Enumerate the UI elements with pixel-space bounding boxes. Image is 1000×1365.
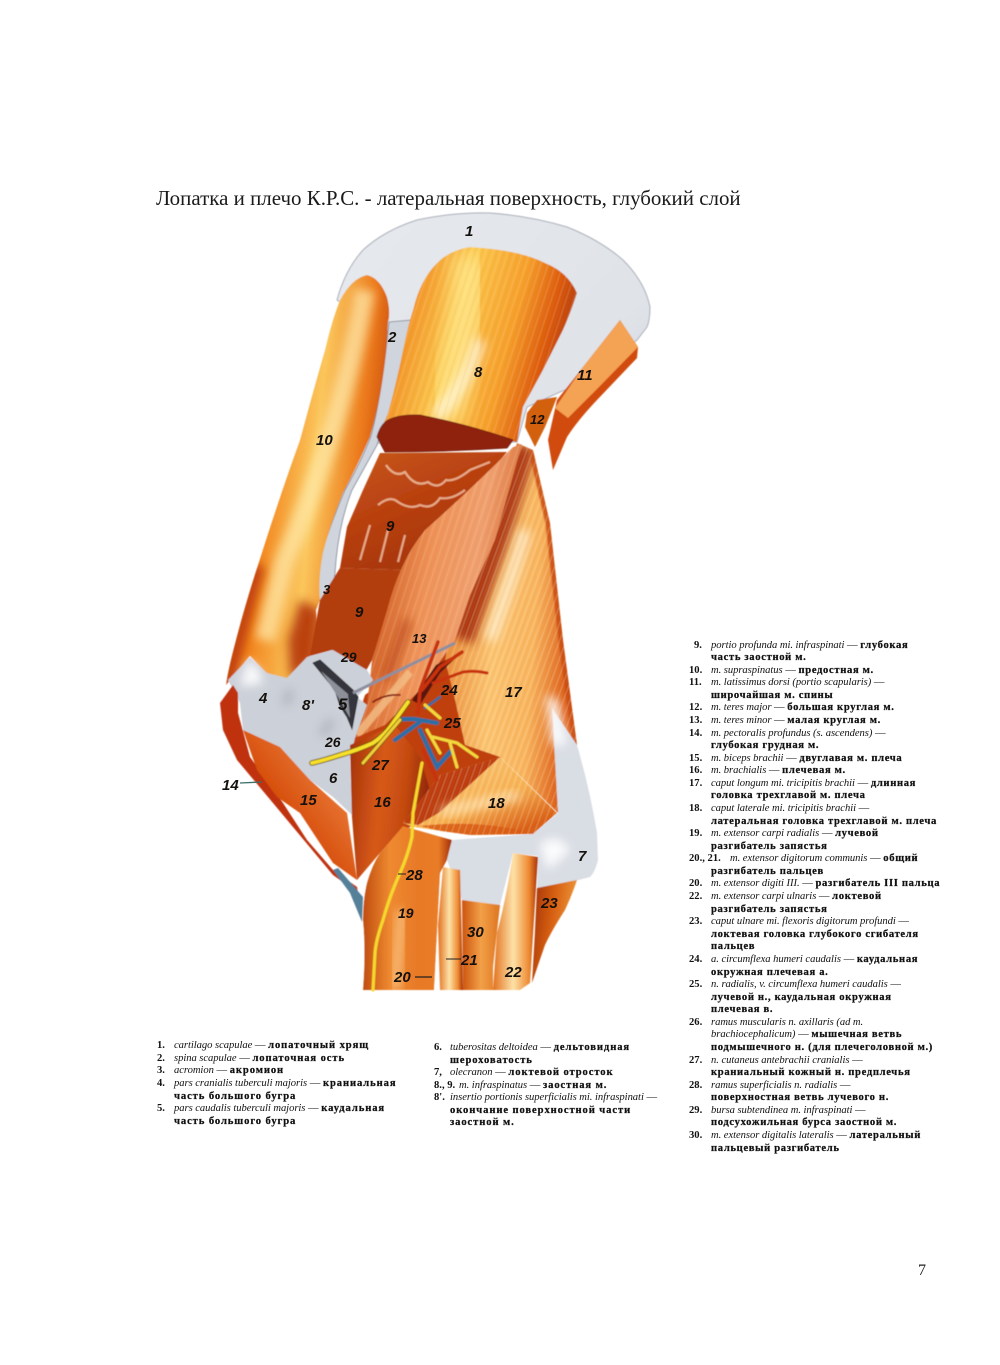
label 9 lower: 9 — [355, 604, 364, 621]
label 30: 30 — [467, 924, 484, 941]
label 11: 11 — [577, 367, 593, 384]
text: 5. — [157, 1103, 165, 1114]
muscle 12: teres major — [525, 397, 557, 447]
label 7: 7 — [578, 848, 587, 865]
legend column: items 9–30: bursa subtendinea m. infraspinati — — [711, 1105, 866, 1116]
legend column: items 9–30: поверхностная ветвь лучевого н. — [711, 1092, 889, 1103]
legend column: items 9–30: m. extensor carpi radialis — лучевой — [711, 828, 879, 839]
olecranon (7) and forearm fascia: grey bone — [447, 708, 598, 905]
highlights on olecranon — [540, 695, 570, 870]
text: 6. — [434, 1042, 442, 1053]
legend column: items 9–30: часть заостной м. — [711, 652, 806, 663]
anatomical illustration: scapula and shoulder — [219, 212, 651, 992]
text: 25. — [689, 979, 702, 990]
legend column: items 9–30: m. supraspinatus — предостная м. — [711, 665, 874, 676]
text: 20., 21. — [689, 853, 721, 864]
legend column: items 9–30: подмышечного н. (для плечеголовной м.) — [711, 1042, 933, 1053]
muscle 30 — [462, 900, 500, 990]
label 6: 6 — [329, 770, 338, 787]
legend column: items 9–30: ramus muscularis n. axillaris (ad m. — [711, 1017, 863, 1028]
legend column: items 1–5: часть большого бугра — [174, 1091, 296, 1102]
legend column: items 9–30: m. brachialis — плечевая м. — [711, 765, 846, 776]
cartilago scapulae (1): grey cartilage — [319, 213, 650, 601]
text: 26. — [689, 1017, 702, 1028]
label 22: 22 — [504, 964, 522, 981]
legend column: items 9–30: a. circumflexa humeri caudalis — каудальная — [711, 954, 918, 965]
muscle 23 — [532, 880, 577, 983]
legend column: items 1–5: acromion — акромион — [174, 1065, 284, 1076]
text: 22. — [689, 891, 702, 902]
cut section of muscle 8 — [377, 415, 513, 452]
label 4: 4 — [258, 690, 268, 707]
muscle 16: brachialis — [350, 725, 430, 880]
legend column: items 9–30: m. extensor digitalis lateralis — латеральный — [711, 1130, 921, 1141]
legend column: items 9–30: разгибатель пальцев — [711, 866, 824, 877]
arteries: a. circumflexa humeri caudalis (24) — [373, 642, 487, 780]
label 20 with leader — [393, 969, 432, 986]
legend column: items 9–30: caput ulnare mi. flexoris digitorum profundi — — [711, 916, 909, 927]
bone: tuberculum majus 4, 8', 5, 6 — [228, 650, 373, 815]
text: 3. — [157, 1065, 165, 1076]
text: 23. — [689, 916, 702, 927]
label 21 with leader: 21 — [460, 952, 478, 969]
label 9 upper: 9 — [386, 518, 395, 535]
label 18: 18 — [488, 795, 505, 812]
label 14 with leader — [222, 777, 262, 794]
muscle 21 — [438, 867, 463, 990]
legend column: items 9–30: локтевая головка глубокого сгибателя — [711, 929, 919, 940]
legend column: items 9–30: m. teres minor — малая круглая м. — [711, 715, 881, 726]
label 20 with leader: 20 — [393, 969, 411, 986]
veins and radial nerve bundle: blue (25) — [395, 697, 452, 767]
text: 15. — [689, 753, 702, 764]
legend column: items 9–30: окружная плечевая а. — [711, 967, 828, 978]
legend column: items 6–8': заостной м. — [450, 1117, 515, 1128]
legend column: items 9–30: caput laterale mi. tricipitis brachii — — [711, 803, 869, 814]
text: 8., 9. — [434, 1080, 455, 1090]
title: Лопатка и плечо К.Р.С. - латеральная поверхность, глубокий слой — [156, 186, 741, 210]
nerves: 26, 27, 28 in yellow — [312, 702, 477, 990]
text: 24. — [689, 954, 702, 965]
legend column: items 9–30: caput longum mi. tricipitis brachii — длинная — [711, 778, 916, 789]
muscle 19: extensor carpi radialis — [363, 826, 452, 995]
text: 30. — [689, 1130, 702, 1141]
legend column: items 9–30: n. cutaneus antebrachii cranialis — — [711, 1055, 863, 1066]
label 5: 5 — [338, 695, 348, 714]
label 28 with leader: 28 — [405, 867, 423, 884]
label 17: 17 — [505, 684, 522, 701]
legend column: items 9–30: пальцев — [711, 941, 755, 952]
legend column: items 1–5 — [157, 1040, 396, 1127]
text: 8'. — [434, 1092, 445, 1103]
legend column: items 9–30: широчайшая м. спины — [711, 690, 833, 701]
label 1: 1 — [465, 223, 473, 240]
blue vessel at lower edge — [333, 868, 363, 922]
text: 27. — [689, 1055, 702, 1066]
muscle 13: teres minor — [355, 444, 522, 738]
legend column: items 1–5: cartilago scapulae — лопаточный хрящ — [174, 1040, 369, 1051]
legend column: items 6–8' — [434, 1042, 658, 1128]
bursa interior — [321, 671, 350, 718]
legend column: items 9–30: разгибатель запястья — [711, 841, 827, 852]
legend column: items 9–30: m. biceps brachii — двуглавая м. плеча — [711, 753, 902, 764]
label 2: 2 — [387, 329, 397, 346]
text: 16. — [689, 765, 702, 776]
legend column: items 1–5: pars caudalis tuberculi majoris — каудальная — [174, 1103, 385, 1114]
text: 11. — [689, 677, 702, 688]
muscle 8: infraspinatus — [383, 247, 577, 442]
label 29: 29 — [340, 649, 357, 665]
label 21 with leader — [446, 952, 478, 969]
text: 18. — [689, 803, 702, 814]
text: 20. — [689, 878, 702, 889]
label 19: 19 — [398, 905, 414, 921]
muscle 17: caput longum tricipitis — [445, 443, 577, 813]
text: 7, — [434, 1067, 442, 1078]
text: 28. — [689, 1080, 702, 1091]
legend column: items 6–8': m. infraspinatus — заостная м. — [459, 1080, 607, 1090]
muscle 22 — [493, 853, 538, 990]
label 23: 23 — [540, 895, 558, 912]
muscle 11: latissimus dorsi — [548, 320, 638, 470]
label 15: 15 — [300, 792, 317, 809]
dark shade behind arteries — [412, 652, 462, 705]
muscle 18: lateral head of triceps — [403, 757, 557, 838]
legend column: items 9–30 — [689, 640, 940, 1154]
text: 1. — [157, 1040, 165, 1051]
lower infraspinatus body 9 — [310, 568, 407, 685]
text: 10. — [689, 665, 702, 676]
legend column: items 9–30: brachiocephalicum) — мышечная ветвь — [711, 1029, 902, 1040]
muscle 10: supraspinatus — [226, 275, 389, 685]
legend column: items 9–30: краниальный кожный н. предплечья — [711, 1067, 911, 1078]
muscle 14: pectoralis profundus — [220, 685, 358, 893]
legend column: items 9–30: подсухожильная бурса заостной м. — [711, 1117, 897, 1128]
legend column: items 9–30: n. radialis, v. circumflexa humeri caudalis — — [711, 979, 901, 990]
text: 12. — [689, 702, 702, 713]
probe retracting the muscle — [353, 643, 455, 693]
text: 19. — [689, 828, 702, 839]
legend column: items 9–30: m. teres major — большая круглая м. — [711, 702, 895, 713]
legend column: items 9–30: плечевая в. — [711, 1004, 773, 1015]
legend column: items 1–5: pars cranialis tuberculi majoris — краниальная — [174, 1078, 396, 1089]
legend column: items 9–30: лучевой н., каудальная окружная — [711, 992, 892, 1003]
legend column: items 9–30: portio profunda mi. infraspinati — глубокая — [711, 640, 908, 650]
fascia squiggles on muscle 9 — [360, 462, 490, 562]
text: 13. — [689, 715, 702, 726]
text: 9. — [694, 640, 702, 650]
label 26: 26 — [324, 734, 341, 750]
bursa slit (29) in bone — [313, 660, 358, 729]
label 25: 25 — [443, 715, 461, 732]
base tissue behind vessels — [350, 630, 502, 832]
legend column: items 9–30: m. pectoralis profundus (s. ascendens) — — [711, 728, 886, 739]
legend column: items 6–8': окончание поверхностной части — [450, 1104, 631, 1116]
legend column: items 9–30: ramus superficialis n. radialis — — [711, 1080, 850, 1091]
legend column: items 6–8': insertio portionis superficialis mi. infraspinati — — [450, 1092, 657, 1103]
legend column: items 6–8': olecranon — локтевой отросток — [450, 1067, 614, 1078]
legend column: items 1–5: spina scapulae — лопаточная ость — [174, 1053, 345, 1064]
label 27: 27 — [371, 757, 389, 774]
text: 14. — [689, 728, 702, 739]
label 14 with leader: 14 — [222, 777, 239, 794]
muscle 9 deep portion — [310, 452, 507, 685]
label 24: 24 — [440, 682, 458, 699]
muscle 15: biceps brachii — [243, 730, 357, 880]
legend column: items 9–30: пальцевый разгибатель — [711, 1143, 840, 1154]
legend column: items 6–8': шероховатость — [450, 1054, 533, 1066]
legend column: items 9–30: m. extensor carpi ulnaris — локтевой — [711, 891, 882, 902]
label 13: 13 — [412, 631, 427, 646]
label 28 with leader — [398, 867, 423, 884]
legend column: items 9–30: m. extensor digiti III. — разгибатель III пальца — [711, 878, 940, 889]
legend column: items 9–30: разгибатель запястья — [711, 904, 827, 915]
text: 4. — [157, 1078, 165, 1089]
legend column: items 9–30: m. latissimus dorsi (portio scapularis) — — [711, 677, 884, 688]
text: 17. — [689, 778, 702, 789]
label 3: 3 — [323, 582, 331, 597]
label 16: 16 — [374, 794, 391, 811]
legend column: items 6–8': tuberositas deltoidea — дельтовидная — [450, 1042, 630, 1053]
legend column: items 9–30: латеральная головка трехглавой м. плеча — [711, 816, 937, 827]
label 12: 12 — [530, 412, 545, 427]
legend column: items 9–30: головка трехглавой м. плеча — [711, 790, 866, 801]
number labels on the illustration — [222, 223, 593, 986]
label 8: 8 — [474, 364, 483, 381]
legend column: items 9–30: глубокая грудная м. — [711, 740, 819, 751]
legend column: items 9–30: m. extensor digitorum communis — общий — [730, 853, 918, 864]
spina scapulae (2) and acromion (3): grey strip — [318, 320, 412, 602]
text: 2. — [157, 1053, 165, 1064]
page number: 7 — [918, 1262, 926, 1279]
label 8 prime: 8' — [302, 697, 314, 714]
text: 29. — [689, 1105, 702, 1116]
label 10: 10 — [316, 432, 333, 449]
legend column: items 1–5: часть большого бугра — [174, 1116, 296, 1127]
